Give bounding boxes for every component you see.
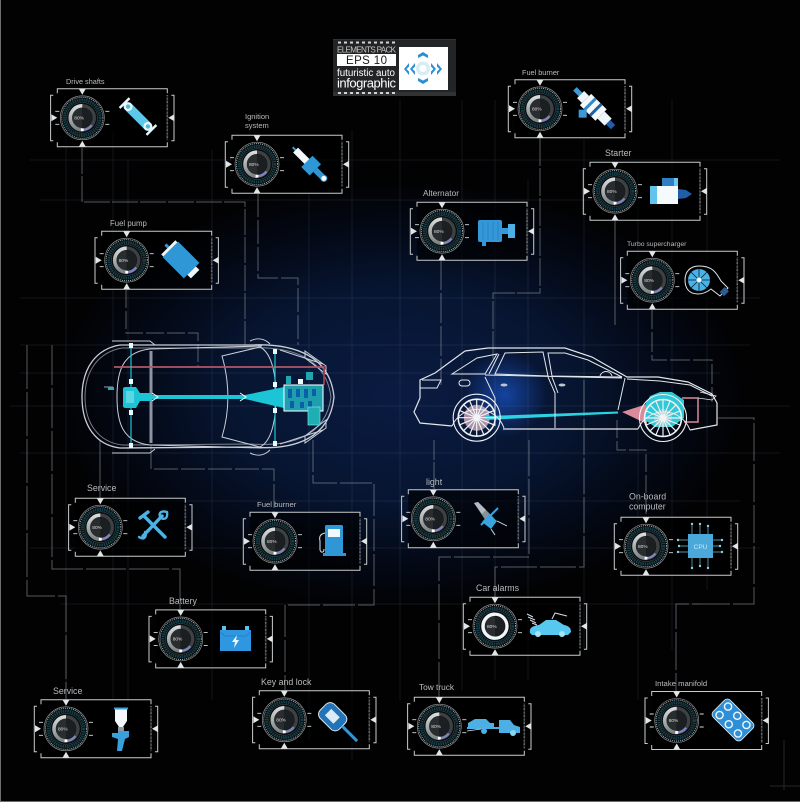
dial highlight ring bbox=[483, 614, 507, 638]
front wheel bbox=[640, 394, 686, 442]
car body outline bbox=[82, 339, 334, 455]
panel: service wrench: 80% bbox=[92, 525, 103, 531]
connector: fuel burner top bbox=[493, 138, 540, 360]
label: fuel burner lower: Fuel burner bbox=[257, 500, 297, 509]
panel: fuel burner top bbox=[508, 68, 632, 140]
icon: intake manifold bbox=[710, 697, 756, 743]
icon: fuel injector bbox=[562, 83, 619, 140]
car side view bbox=[414, 348, 717, 442]
connector: starter bbox=[614, 220, 616, 325]
label: tow truck: Tow truck bbox=[419, 682, 455, 692]
icon: alternator bbox=[478, 220, 515, 246]
icon: light bulb bbox=[474, 502, 507, 535]
connector: turbo supercharger bbox=[652, 309, 712, 402]
connector: drive shafts bbox=[82, 148, 245, 345]
panel: starter bbox=[583, 148, 707, 221]
panel: light: 80% bbox=[425, 516, 436, 522]
icon: fuel station pump bbox=[320, 525, 346, 556]
label: alternator: Alternator bbox=[423, 188, 459, 198]
connector: on-board computer bbox=[617, 420, 646, 517]
icon: convertible car with alarm bbox=[527, 613, 571, 637]
panel: key and lock: 80% bbox=[276, 718, 287, 724]
panel: battery: 80% bbox=[173, 636, 183, 642]
logo text: eps 10: EPS 10 bbox=[346, 55, 387, 67]
panel: on-board computer bbox=[614, 492, 738, 576]
panel: car alarms: 80% bbox=[487, 624, 497, 630]
icon: cpu chip: CPU bbox=[694, 544, 708, 551]
panel: tow truck bbox=[408, 682, 531, 756]
rear seat bar bbox=[150, 351, 152, 443]
icon: spark plug bbox=[287, 142, 332, 186]
logo text: infographic: infographic bbox=[337, 76, 396, 90]
panel: tow truck: 80% bbox=[431, 724, 442, 730]
connector: key and lock bbox=[285, 440, 374, 691]
connector: service lower bbox=[27, 345, 66, 700]
panel: alternator bbox=[410, 188, 534, 261]
label: turbo supercharger: Turbo supercharger bbox=[627, 241, 687, 248]
corner mark bbox=[770, 740, 800, 790]
rear wheel bbox=[453, 394, 500, 441]
panel: light bbox=[402, 477, 525, 548]
panel: battery bbox=[149, 596, 273, 668]
panel: fuel pump: 80% bbox=[119, 258, 129, 264]
icon: car key bbox=[316, 700, 364, 748]
drivetrain bbox=[123, 345, 284, 448]
panel: car alarms bbox=[463, 583, 587, 656]
label: fuel burner: Fuel burner bbox=[522, 68, 560, 77]
panel: ignition system: 80% bbox=[249, 162, 259, 168]
panel: drive shafts bbox=[51, 77, 174, 147]
logo badge bbox=[333, 39, 456, 96]
icon: fuel pump cylinder bbox=[158, 237, 203, 282]
panel: turbo supercharger bbox=[621, 241, 744, 310]
panel: fuel burner lower bbox=[243, 500, 367, 571]
icon: wrench and screwdriver bbox=[139, 511, 167, 538]
axle nodes bbox=[129, 343, 277, 448]
door handles bbox=[500, 384, 508, 386]
label: starter: Starter bbox=[605, 148, 631, 158]
panel: turbo supercharger: 80% bbox=[644, 278, 655, 284]
connector: tow truck bbox=[439, 440, 529, 697]
connector: car alarms bbox=[495, 380, 584, 597]
panel: key and lock bbox=[253, 677, 376, 749]
label: key and lock: Key and lock bbox=[261, 677, 312, 687]
label: service: Service bbox=[87, 483, 116, 493]
red brake line bbox=[114, 367, 324, 385]
connector: ignition system bbox=[258, 193, 298, 345]
connector: fuel burner lower bbox=[151, 445, 274, 512]
icon: turbocharger bbox=[685, 266, 729, 296]
engine block bbox=[104, 372, 323, 425]
pink and cyan drivetrain bbox=[464, 392, 698, 431]
panel: fuel pump bbox=[95, 219, 219, 290]
label: on-board computer: computer bbox=[629, 502, 666, 512]
connector: fuel pump bbox=[126, 290, 198, 367]
icon: starter motor bbox=[650, 178, 692, 204]
connector: intake manifold bbox=[676, 418, 754, 691]
label: drive shafts: Drive shafts bbox=[66, 77, 105, 86]
label: ignition system: system bbox=[245, 121, 269, 130]
panel: on-board computer: 80% bbox=[638, 544, 648, 550]
icon: tow truck bbox=[467, 719, 520, 736]
icon: spray gun bbox=[112, 708, 129, 751]
panel: fuel burner top: 80% bbox=[532, 106, 542, 112]
panel: drive shafts: 80% bbox=[74, 116, 85, 122]
connector: light bbox=[433, 440, 435, 490]
connector lines bbox=[27, 138, 754, 700]
label: fuel pump: Fuel pump bbox=[110, 219, 148, 228]
connector: alternator bbox=[440, 260, 442, 385]
car top view bbox=[82, 339, 334, 455]
panel: service spray gun bbox=[34, 686, 158, 758]
connector: service bbox=[99, 440, 101, 498]
logo text: futuristic auto: futuristic auto bbox=[337, 68, 396, 79]
label: intake manifold: Intake manifold bbox=[655, 679, 707, 688]
panel: intake manifold: 80% bbox=[669, 718, 679, 724]
panel: service spray gun: 80% bbox=[58, 726, 68, 732]
label: light: light bbox=[426, 477, 443, 487]
label: on-board computer: On-board bbox=[629, 492, 666, 502]
icon: drive shaft bbox=[120, 98, 156, 135]
label: ignition system: Ignition bbox=[245, 112, 269, 121]
panel: ignition system bbox=[225, 112, 349, 194]
label: battery: Battery bbox=[169, 596, 197, 606]
logo text: elements pack: ELEMENTS PACK bbox=[337, 46, 397, 54]
panel: starter: 80% bbox=[607, 189, 617, 195]
label: service lower: Service bbox=[53, 686, 82, 696]
panel: intake manifold bbox=[645, 679, 769, 750]
label: car alarms: Car alarms bbox=[476, 583, 520, 593]
connector: battery bbox=[52, 345, 180, 610]
icon: logo chevrons bbox=[404, 52, 442, 84]
panel: fuel burner lower: 80% bbox=[267, 539, 277, 545]
panel: alternator: 80% bbox=[434, 229, 444, 235]
panel: service wrench bbox=[69, 483, 192, 557]
icon: battery bbox=[220, 626, 251, 651]
car silhouette bbox=[414, 348, 717, 430]
